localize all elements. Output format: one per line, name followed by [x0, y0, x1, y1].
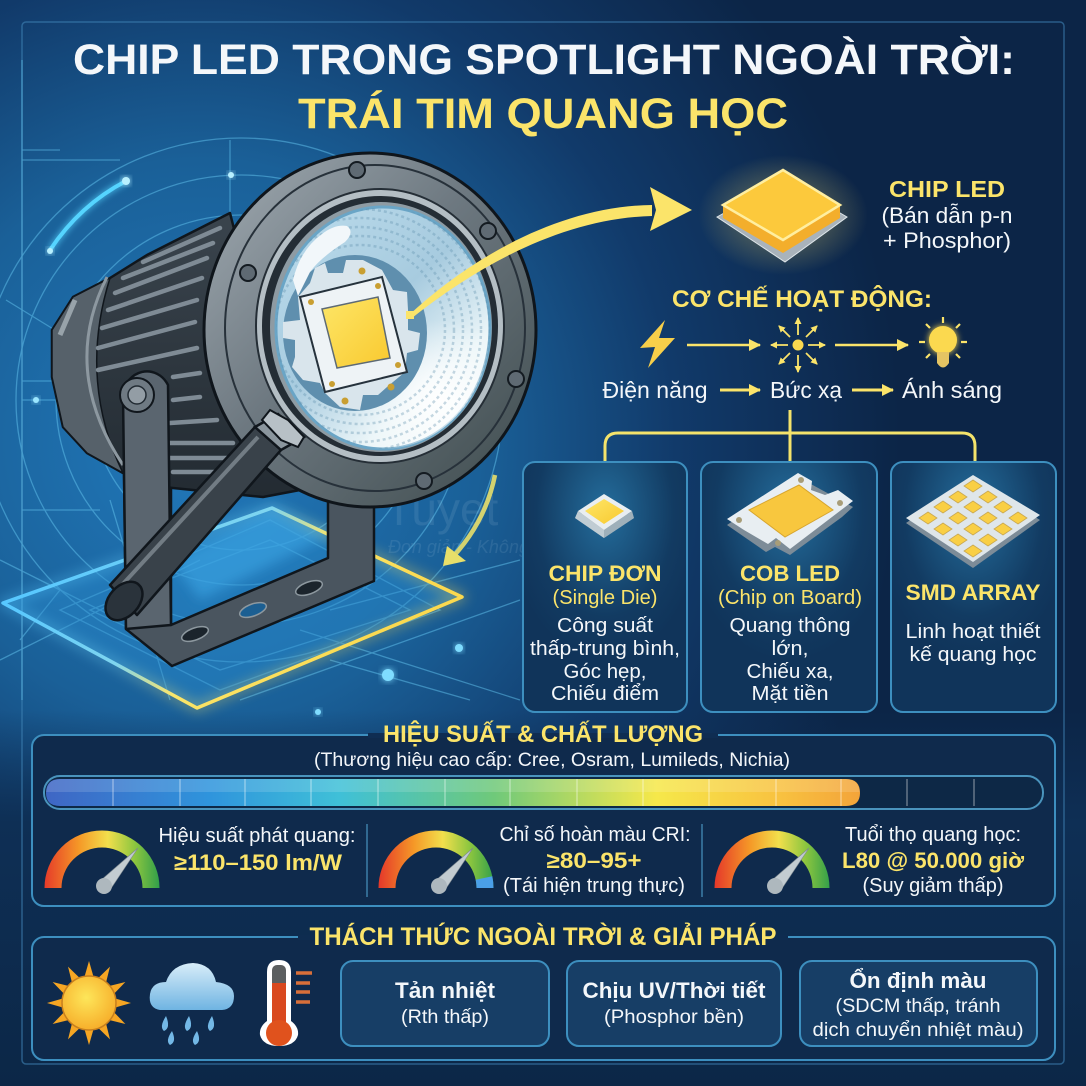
illustration: spotlight [3, 153, 536, 708]
panel: chip don: CHIP ĐƠN [548, 561, 662, 586]
title [73, 35, 1015, 138]
box: colour stability: Ổn định màu [850, 968, 986, 993]
arrow [687, 344, 760, 346]
icon: rain cloud [150, 963, 234, 1045]
gauge 2 [387, 839, 485, 894]
gauge 3 [723, 839, 821, 894]
watermark: Tuyet [385, 483, 499, 535]
glowing arc decoration [33, 172, 463, 715]
metric 1 [158, 825, 356, 875]
chip LED label: + Phosphor) [883, 228, 1011, 253]
icon: radiation [771, 318, 825, 372]
brands note: (Thương hiệu cao cấp: Cree, Osram, Lumileds, Nichia) [314, 749, 790, 771]
metric 2 [500, 824, 690, 897]
icon: sun [47, 961, 131, 1045]
divider lines [367, 824, 702, 897]
panel: COB LED: (Chip on Board) [718, 587, 862, 609]
icon: SMD grid [906, 475, 1040, 568]
bracket [124, 470, 374, 666]
label: process row: Ánh sáng [902, 377, 1002, 403]
panel: COB LED: COB LED [740, 561, 840, 586]
label: process row [602, 377, 1002, 403]
panel: COB LED: lớn, [772, 638, 808, 660]
metric 2: Chỉ số hoàn màu CRI: [500, 824, 690, 846]
panel: COB LED: Quang thông [730, 615, 850, 637]
label: process row: Điện năng [602, 377, 708, 403]
lens [274, 206, 492, 450]
pivot arm [120, 371, 171, 629]
title: CHIP LED TRONG SPOTLIGHT NGOÀI TRỜI: [73, 35, 1015, 84]
panel: chip don: Góc hẹp, [564, 661, 646, 683]
panel: SMD array [891, 462, 1056, 712]
panel: COB LED [701, 462, 877, 712]
watermark: Lights [560, 483, 683, 535]
box: colour stability [800, 961, 1037, 1046]
panel: chip don [523, 462, 687, 712]
arrow: lens to platform [443, 475, 495, 566]
handle [98, 410, 304, 627]
panel: COB LED: Mặt tiền [752, 683, 828, 705]
box: colour stability: (SDCM thấp, tránh [836, 996, 1000, 1017]
box: UV and weather: Chịu UV/Thời tiết [582, 978, 766, 1003]
metric 2: ≥80–95+ [546, 848, 642, 873]
panel: outdoor challenges [32, 921, 1055, 1060]
chip LED label [882, 176, 1012, 253]
panel: chip don: Công suất [557, 615, 653, 637]
progress bar [44, 776, 1043, 809]
arrow: lens to chip [406, 187, 692, 319]
gauge 1 [53, 839, 151, 894]
panel: chip don: (Single Die) [552, 587, 658, 609]
connector [605, 410, 975, 461]
watermark [385, 483, 683, 557]
metric 3 [842, 824, 1024, 897]
platform glow outline [3, 508, 462, 708]
box: UV and weather [567, 961, 781, 1046]
screws [240, 162, 524, 489]
icon: light bulb [919, 317, 967, 368]
box: heat dissipation: (Rth thấp) [401, 1007, 489, 1028]
panel: chip don: Chiếu điểm [551, 683, 659, 705]
heading: THÁCH THỨC NGOÀI TRỜI & GIẢI PHÁP [310, 921, 776, 951]
panel: SMD array: kế quang học [910, 644, 1036, 666]
lamp body with fins [52, 213, 300, 497]
metric 3: L80 @ 50.000 giờ [842, 848, 1024, 873]
box: heat dissipation: Tản nhiệt [395, 978, 496, 1003]
arrow [835, 344, 908, 346]
panel: performance and quality [32, 720, 1055, 906]
icon: thermometer [260, 960, 312, 1046]
icon: single die [575, 494, 634, 538]
metric 1: Hiệu suất phát quang: [158, 825, 356, 847]
LED chip on board [283, 260, 420, 410]
panel: SMD array: SMD ARRAY [906, 580, 1041, 605]
heading: HIỆU SUẤT & CHẤT LƯỢNG [383, 720, 703, 748]
metric 3: (Suy giảm thấp) [862, 875, 1004, 897]
icon: lightning [640, 320, 675, 368]
label: process row: Bức xạ [770, 377, 843, 403]
heading: mechanism: CƠ CHẾ HOẠT ĐỘNG: [672, 285, 932, 313]
panel: chip don: thấp-trung bình, [530, 638, 680, 660]
metric 1: ≥110–150 lm/W [174, 850, 342, 875]
title: TRÁI TIM QUANG HỌC [298, 90, 788, 138]
chip LED label: (Bán dẫn p-n [882, 203, 1012, 228]
box: colour stability: dịch chuyển nhiệt màu) [812, 1020, 1024, 1041]
box: heat dissipation [341, 961, 549, 1046]
metric 2: (Tái hiện trung thực) [503, 875, 685, 897]
front ring [204, 153, 536, 507]
panel: COB LED: Chiếu xa, [746, 661, 834, 683]
watermark: Đơn giản - Không gian chất [388, 537, 608, 557]
box: UV and weather: (Phosphor bền) [604, 1007, 744, 1028]
icon: COB [727, 473, 853, 555]
metric 3: Tuổi thọ quang học: [845, 824, 1021, 846]
chip LED label: CHIP LED [889, 176, 1005, 202]
chip LED icon [698, 155, 868, 275]
panel: SMD array: Linh hoạt thiết [906, 621, 1041, 643]
